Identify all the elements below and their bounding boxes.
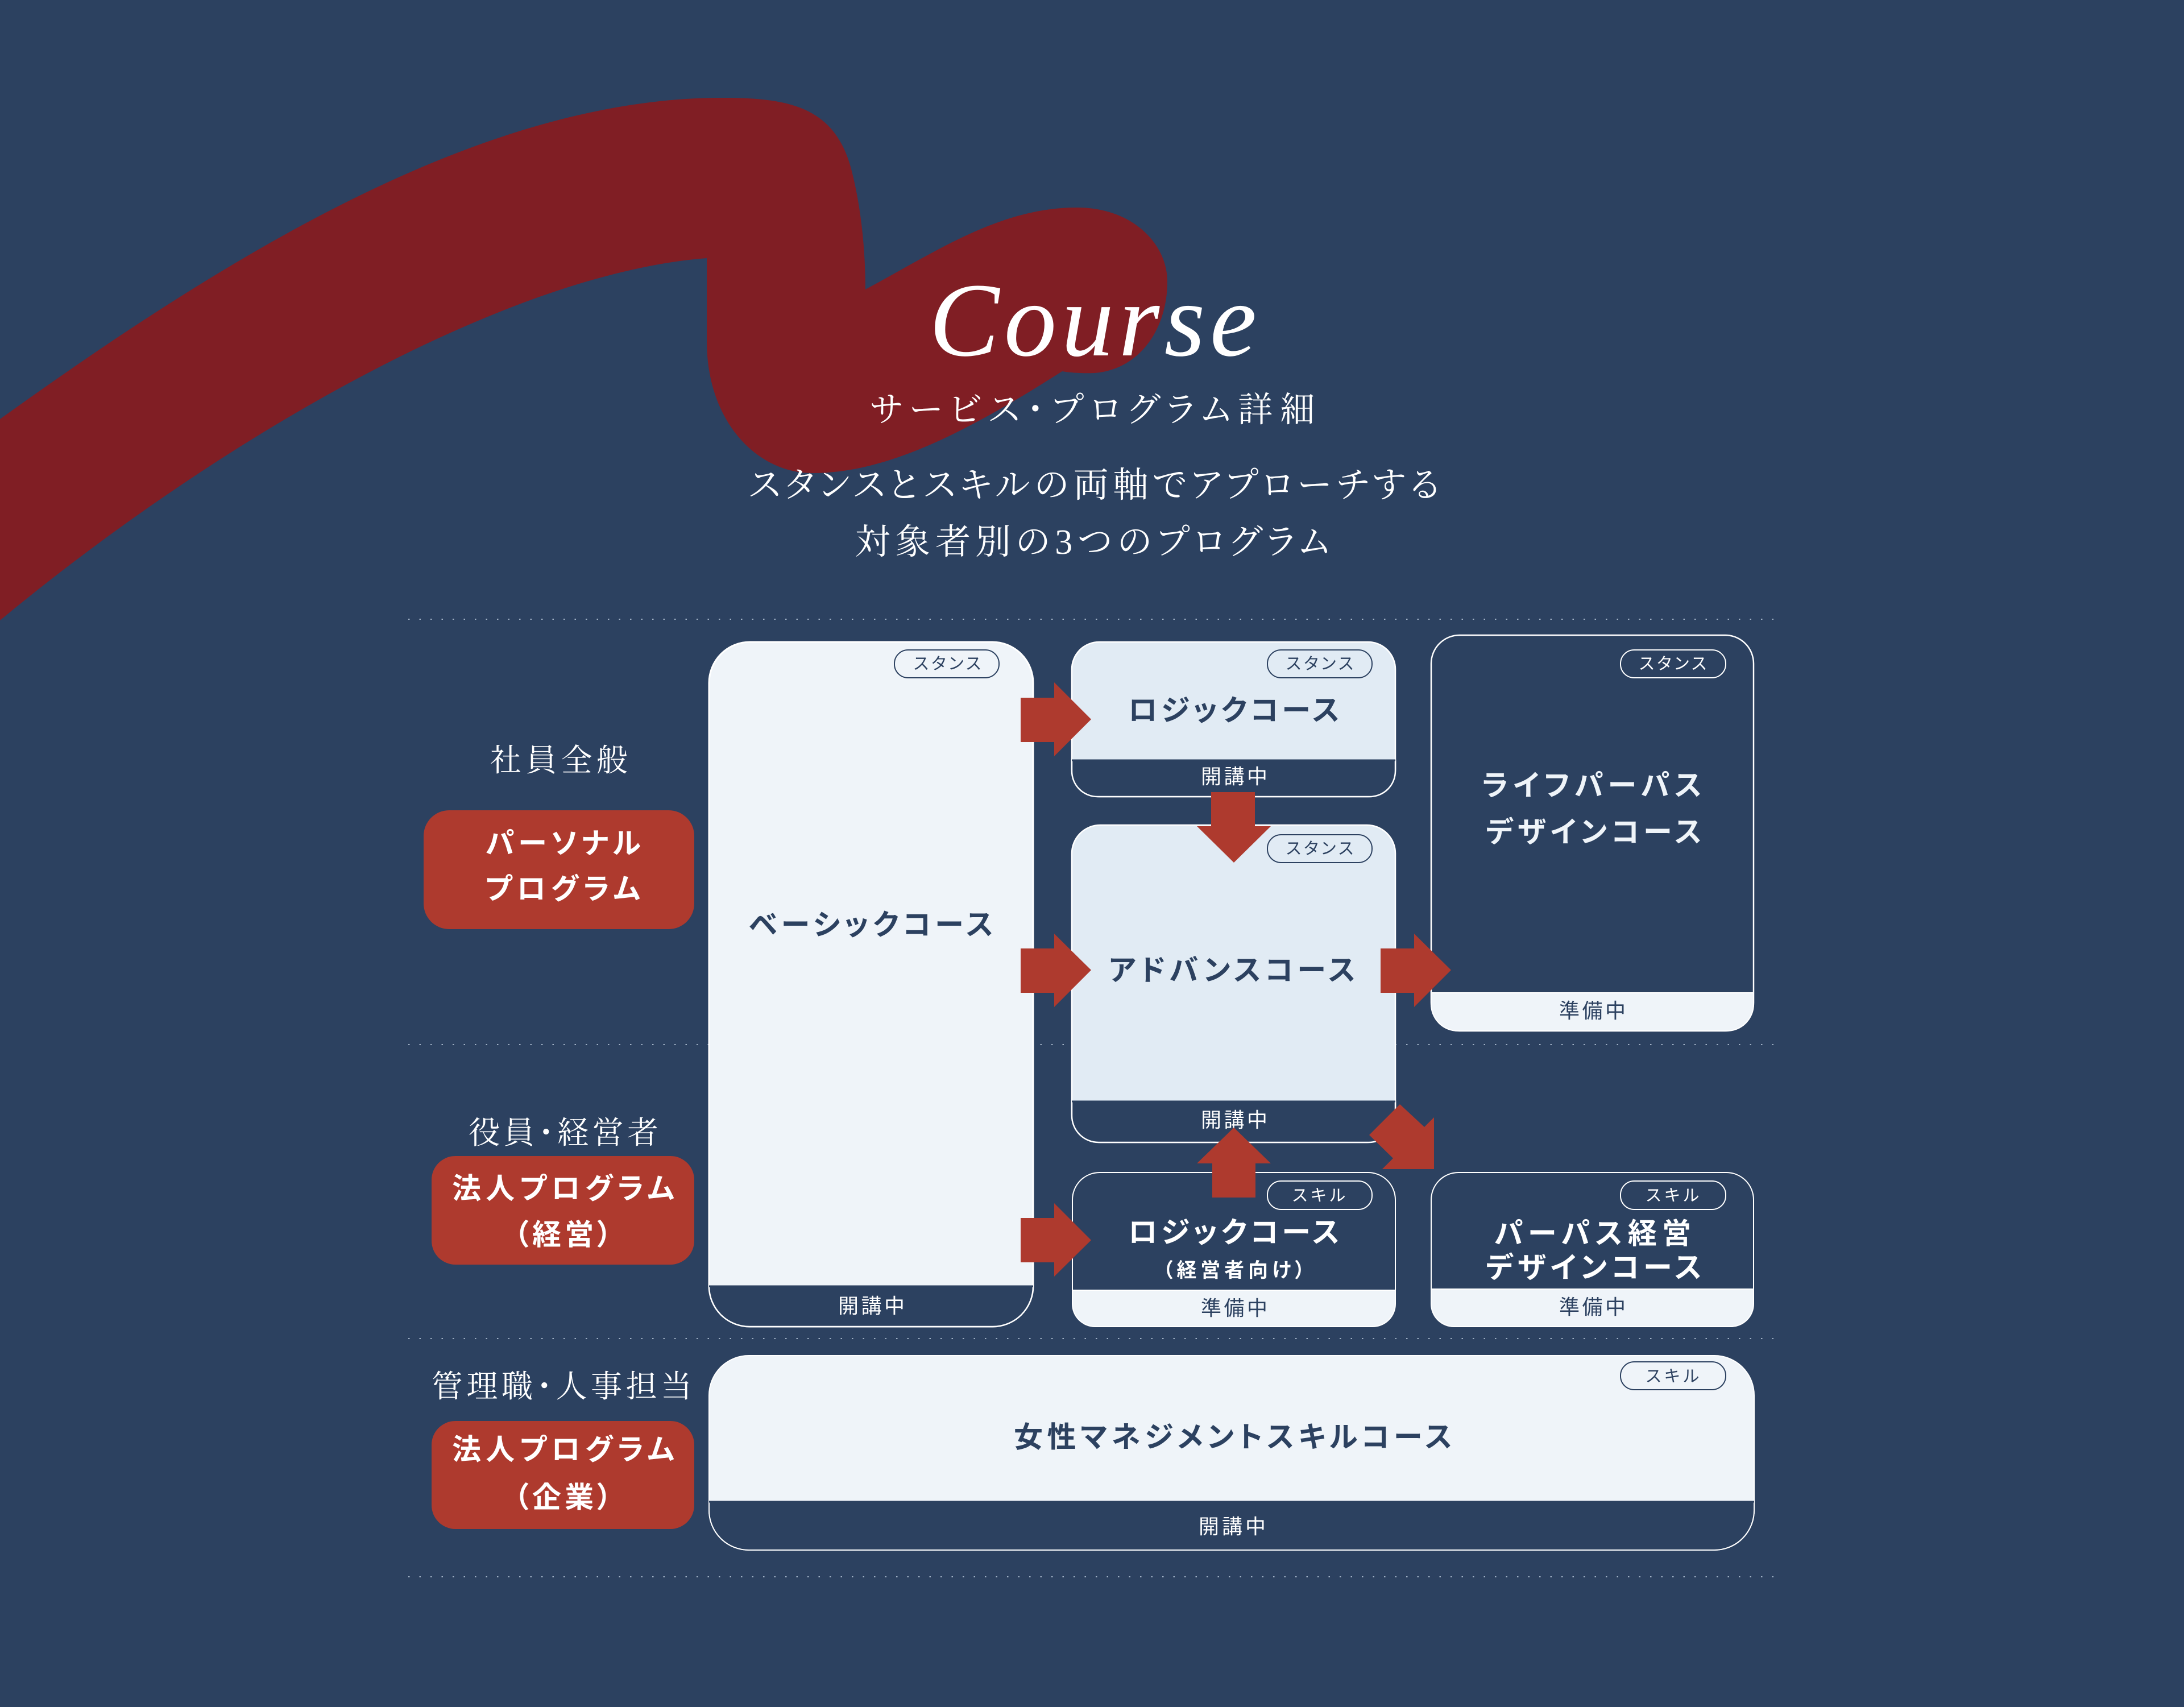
card title line 2: デザインコース (1486, 1252, 1702, 1284)
tag (1267, 650, 1372, 678)
card title: 女性マネジメントスキルコース (1014, 1421, 1452, 1453)
row label: corporate program (432, 1369, 694, 1529)
pill: personal program (424, 810, 694, 929)
row label: personal program (424, 743, 694, 929)
card subtitle: （経営者向け） (1163, 1259, 1305, 1282)
status: 開講中 (1199, 1515, 1266, 1538)
arrow: basic to advanced (1021, 934, 1091, 1007)
pill text line 1: 法人プログラム (452, 1433, 674, 1466)
tag (1621, 650, 1726, 678)
audience: 役員・経営者: 役員・経営者 (469, 1116, 658, 1150)
row label: executive program (432, 1116, 694, 1265)
card: basic course: スタンス (914, 655, 981, 673)
status: 開講中 (1201, 765, 1267, 788)
pill text line 2: （企業） (514, 1481, 612, 1514)
pill: corporate program executive (432, 1156, 694, 1265)
lead line 2: 対象者別の3つのプログラム (855, 523, 1329, 562)
status: 開講中 (838, 1294, 905, 1317)
audience: 社員全般: 社員全般 (490, 743, 628, 778)
tag (1267, 835, 1372, 863)
card title line 1: パーパス経営 (1494, 1217, 1691, 1250)
pill text line 1: 法人プログラム (452, 1172, 674, 1205)
arrow: logic down to advanced (1197, 792, 1271, 863)
card: logic course stance (1072, 642, 1395, 797)
card: life purpose design course: スタンス (1639, 655, 1706, 673)
status: 準備中 (1559, 1295, 1626, 1319)
card: women's management skill course: スキル (1646, 1368, 1699, 1386)
card: advanced course: スタンス (1286, 840, 1353, 858)
arrow: logic executive up to advanced (1197, 1128, 1271, 1198)
card: logic course stance: スタンス (1286, 655, 1353, 673)
card title: ロジックコース (1128, 1216, 1340, 1249)
pill text line 2: （経営） (514, 1219, 612, 1251)
tag (1267, 1181, 1372, 1209)
card: advanced course (1072, 825, 1395, 1142)
status: 準備中 (1559, 999, 1626, 1022)
card title: ロジックコース (1128, 694, 1340, 727)
pill: corporate program company (432, 1421, 694, 1529)
status: 準備中 (1201, 1296, 1267, 1320)
card: logic course for executives: スキル (1292, 1187, 1345, 1205)
arrow: basic to logic executive (1021, 1203, 1091, 1277)
subtitle: サービス・プログラム詳細 (871, 391, 1315, 429)
pill text line 1: パーソナル (486, 827, 641, 860)
card: logic course for executives (1072, 1172, 1395, 1327)
card: purpose management design course: スキル (1646, 1187, 1699, 1205)
card title: ベーシックコース (749, 909, 993, 941)
decorative red ribbon (0, 98, 1167, 620)
card: women's management skill course (709, 1356, 1754, 1550)
audience: 管理職・人事担当: 管理職・人事担当 (432, 1369, 692, 1404)
tag (1621, 1362, 1726, 1390)
title: Course: Course (929, 262, 1257, 379)
card title line 1: ライフパーパス (1482, 769, 1702, 802)
pill text line 2: プログラム (485, 873, 640, 905)
card: purpose management design course (1431, 1172, 1754, 1327)
lead line 1: スタンスとスキルの両軸でアプローチする (748, 466, 1439, 505)
card: basic course (709, 642, 1033, 1327)
tag (894, 650, 999, 678)
title block (748, 262, 1439, 562)
card title: アドバンスコース (1109, 954, 1356, 987)
arrow: basic to logic (1021, 682, 1091, 756)
tag (1621, 1181, 1726, 1209)
arrow: advanced to life purpose (1381, 934, 1451, 1007)
arrow: advanced diagonal to purpose management (1369, 1104, 1434, 1169)
card title line 2: デザインコース (1486, 816, 1702, 848)
card: life purpose design course (1431, 635, 1754, 1031)
status: 開講中 (1201, 1108, 1267, 1132)
